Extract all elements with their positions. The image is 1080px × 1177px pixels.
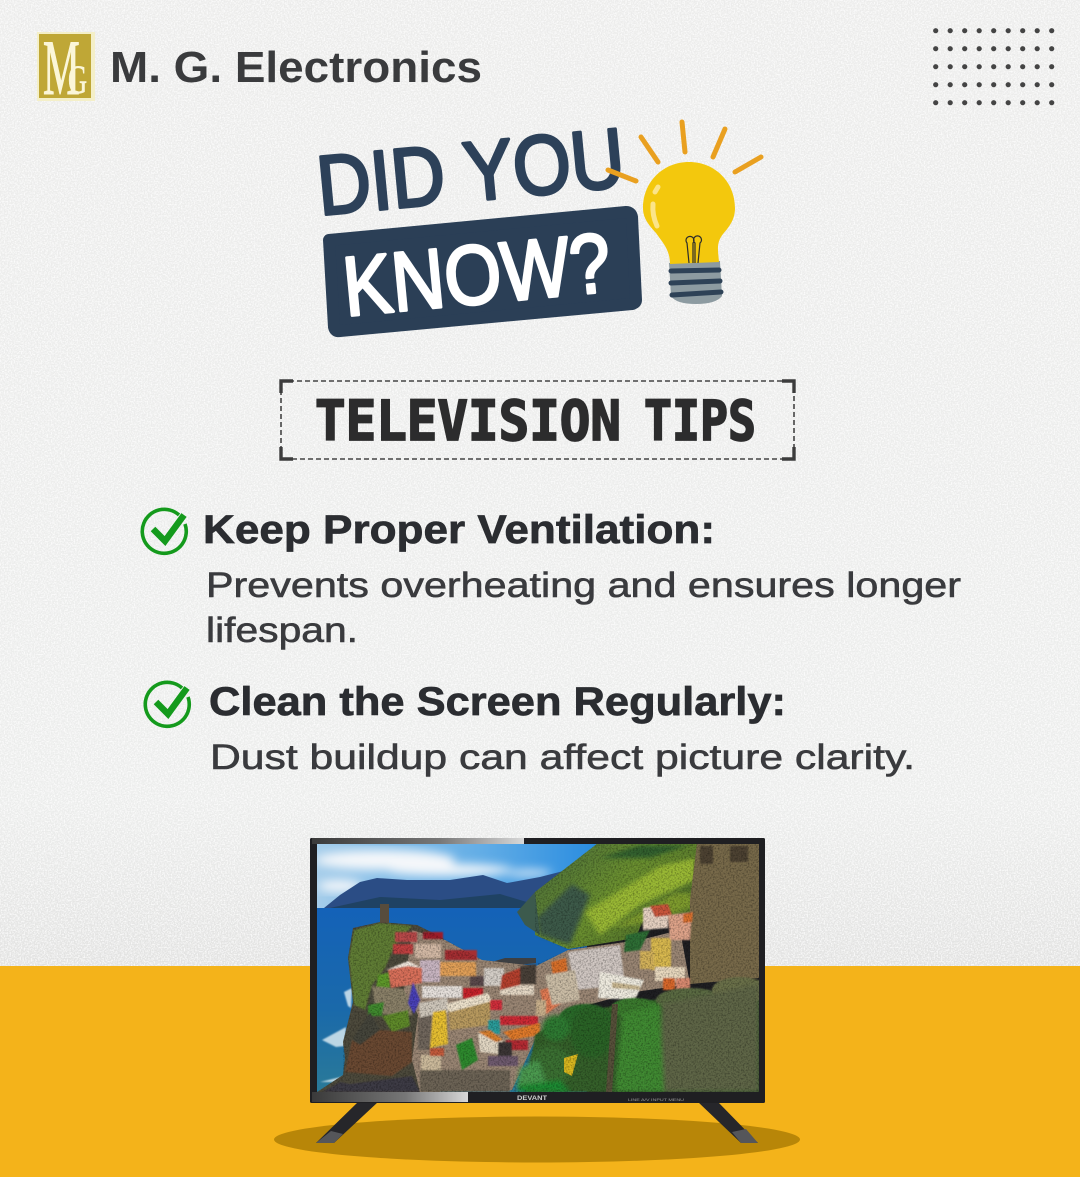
tower on headland xyxy=(380,904,389,923)
tv frame xyxy=(310,838,765,1103)
green patches xyxy=(368,1002,384,1016)
breakwater xyxy=(494,958,536,964)
bulb rays xyxy=(608,122,761,181)
stone wall xyxy=(372,986,412,1015)
filament xyxy=(686,236,702,263)
hillside stair xyxy=(606,1004,618,1092)
tip 1 heading: Keep Proper Ventilation: xyxy=(203,508,715,552)
rubble shore xyxy=(322,1076,420,1092)
tip 2 body: Dust buildup can affect picture clarity. xyxy=(210,738,915,777)
foreground shrubs xyxy=(516,984,759,1092)
bulb base xyxy=(669,261,722,304)
title text: TELEVISION xyxy=(315,389,621,453)
distant right shoreline xyxy=(517,892,540,935)
tip 2: clean the screen regularly xyxy=(145,680,915,777)
tv control labels: LINE A/V INPUT MENU xyxy=(628,1098,685,1102)
stone tower wall xyxy=(690,843,759,984)
decorative dot grid xyxy=(933,28,1054,105)
panel: television tips title xyxy=(281,381,794,459)
heading line: KNOW?: KNOW? xyxy=(339,215,615,334)
dark label box xyxy=(329,212,636,331)
green hillside xyxy=(535,843,700,949)
clouds xyxy=(315,850,552,892)
yellow leaves xyxy=(564,1054,578,1076)
bulb glass xyxy=(643,162,735,264)
logo: M. G. monogram: G xyxy=(68,59,87,102)
icon: green check xyxy=(145,682,189,726)
tip 1: keep proper ventilation xyxy=(142,508,961,650)
distant mountains xyxy=(324,872,562,908)
picture grain on land xyxy=(317,844,759,1092)
title text: TIPS xyxy=(644,389,756,453)
icon: green check xyxy=(142,509,186,553)
tv stand legs xyxy=(316,1102,758,1143)
upper green xyxy=(349,923,412,1010)
television xyxy=(310,838,768,1143)
heading: did you know xyxy=(313,110,636,334)
sky xyxy=(317,844,597,908)
sea foam xyxy=(320,988,352,1082)
top frame highlight xyxy=(312,838,524,844)
brand name: M. G. Electronics xyxy=(110,43,482,92)
glass highlight xyxy=(653,187,658,226)
foreground vegetation xyxy=(525,977,768,1092)
tower battlements xyxy=(700,846,748,864)
village base xyxy=(404,930,690,1092)
tip 1 body line 2: lifespan. xyxy=(206,611,358,650)
logo: M. G. monogram xyxy=(37,24,95,111)
tv shadow xyxy=(274,1116,800,1162)
tip 1 body: Prevents overheating and ensures longer xyxy=(206,566,961,605)
left headland cliff xyxy=(317,922,444,1092)
sea xyxy=(317,908,587,1092)
bottom frame highlight xyxy=(312,1092,468,1102)
heading line: DID YOU: DID YOU xyxy=(313,110,628,233)
yellow floor band xyxy=(0,966,1080,1177)
hillside terraces xyxy=(537,845,695,945)
tv brand: DEVANT xyxy=(517,1095,547,1102)
base threads xyxy=(671,270,721,295)
lower rock xyxy=(345,1030,412,1076)
logo: M. G. monogram: M xyxy=(43,24,80,111)
screen picture xyxy=(315,843,768,1092)
cliff detail xyxy=(322,923,420,1092)
tip 2 heading: Clean the Screen Regularly: xyxy=(209,680,786,724)
icon: light bulb xyxy=(608,122,761,304)
village buildings xyxy=(386,904,693,1092)
